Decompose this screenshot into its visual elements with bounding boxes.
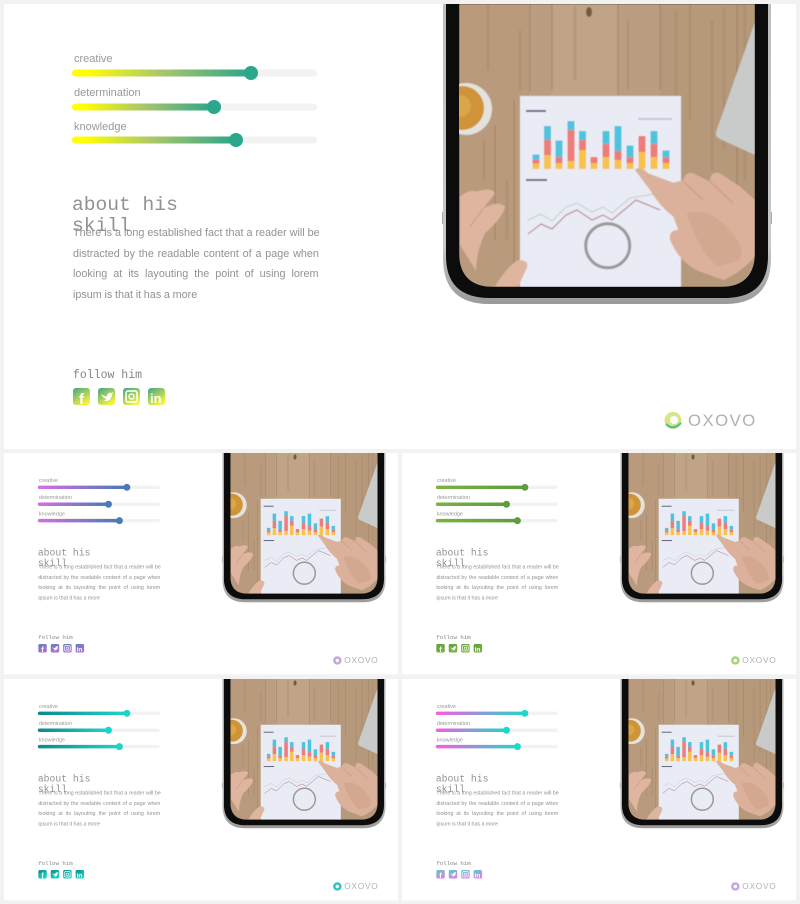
follow him label: follow him (436, 860, 471, 867)
social icons (38, 870, 84, 880)
body text (38, 564, 161, 601)
panel: small slide, teal theme (4, 679, 398, 900)
heading: about his (38, 773, 91, 784)
skill sliders: determination (437, 495, 470, 501)
skill sliders: creative (437, 478, 456, 484)
body text: There is a long established fact that a reader will be (436, 564, 559, 570)
social icons (436, 870, 482, 880)
body text: distracted by the readable content of a page when (436, 801, 558, 807)
heading (38, 547, 91, 569)
skill sliders: creative (74, 53, 113, 65)
skill sliders: knowledge (39, 738, 65, 744)
panel: main slide, yellow-green theme (4, 4, 796, 449)
heading: skill (436, 558, 465, 569)
body text: distracted by the readable content of a page when (73, 248, 319, 260)
skill sliders: knowledge (39, 512, 65, 518)
skill sliders: determination (437, 721, 470, 727)
body text: distracted by the readable content of a page when (38, 801, 160, 807)
heading: skill (38, 784, 67, 795)
follow him label: follow him (436, 634, 471, 641)
logo: OXOVO (742, 655, 776, 665)
heading (436, 773, 489, 795)
skill sliders (38, 704, 160, 750)
panel: small slide, purple theme (4, 453, 398, 674)
skill sliders: determination (39, 721, 72, 727)
logo: OXOVO (344, 655, 378, 665)
logo: OXOVO (344, 881, 378, 891)
social icons: f (439, 645, 442, 654)
phone mockup with desk photo (619, 679, 784, 828)
phone mockup with desk photo (221, 453, 386, 602)
body text: There is a long established fact that a reader will be (73, 227, 320, 239)
body text: There is a long established fact that a reader will be (436, 790, 559, 796)
social icons: in (475, 646, 480, 653)
panel: small slide, green theme (402, 453, 796, 674)
heading (72, 194, 178, 237)
skill sliders: knowledge (437, 738, 463, 744)
skill sliders: creative (437, 704, 456, 710)
logo: OXOVO (688, 411, 757, 430)
heading: skill (72, 215, 131, 237)
skill sliders (436, 704, 558, 750)
body text (73, 227, 320, 301)
social icons: f (79, 391, 85, 408)
panel: small slide, pink-cyan theme (402, 679, 796, 900)
follow him label: follow him (38, 634, 73, 641)
body text: There is a long established fact that a reader will be (38, 790, 161, 796)
social icons (436, 644, 482, 654)
body text: ipsum is that it has a more (436, 595, 498, 601)
body text: distracted by the readable content of a page when (38, 575, 160, 581)
body text: distracted by the readable content of a page when (436, 575, 558, 581)
logo: OXOVO (742, 881, 776, 891)
skill sliders: creative (39, 704, 58, 710)
phone mockup with desk photo (440, 4, 772, 304)
skill sliders (436, 478, 558, 524)
skill sliders: knowledge (437, 512, 463, 518)
body text: ipsum is that it has a more (38, 821, 100, 827)
heading (436, 547, 489, 569)
skill sliders (38, 478, 160, 524)
heading: skill (436, 784, 465, 795)
social icons: in (475, 872, 480, 879)
social icons: in (77, 646, 82, 653)
body text: ipsum is that it has a more (436, 821, 498, 827)
skill sliders: creative (39, 478, 58, 484)
follow him label: follow him (73, 369, 142, 382)
body text: looking at its layouting the point of using lorem (38, 585, 161, 591)
social icons: in (150, 391, 162, 406)
body text: looking at its layouting the point of using lorem (73, 268, 318, 280)
heading: about his (38, 547, 91, 558)
skill sliders: knowledge (74, 121, 127, 133)
body text: There is a long established fact that a reader will be (38, 564, 161, 570)
heading (38, 773, 91, 795)
body text (38, 790, 161, 827)
heading: about his (436, 547, 489, 558)
body text (436, 790, 559, 827)
heading: about his (72, 194, 178, 216)
social icons (38, 644, 84, 654)
phone mockup with desk photo (619, 453, 784, 602)
social icons: f (41, 871, 44, 880)
skill sliders (72, 53, 317, 147)
social icons: f (439, 871, 442, 880)
body text: looking at its layouting the point of using lorem (436, 585, 559, 591)
skill sliders: determination (39, 495, 72, 501)
body text: ipsum is that it has a more (38, 595, 100, 601)
body text (436, 564, 559, 601)
phone mockup with desk photo (221, 679, 386, 828)
social icons: in (77, 872, 82, 879)
heading: about his (436, 773, 489, 784)
social icons (73, 388, 165, 408)
social icons: f (41, 645, 44, 654)
skill sliders: determination (74, 87, 141, 99)
body text: looking at its layouting the point of using lorem (38, 811, 161, 817)
body text: looking at its layouting the point of using lorem (436, 811, 559, 817)
heading: skill (38, 558, 67, 569)
follow him label: follow him (38, 860, 73, 867)
body text: ipsum is that it has a more (73, 289, 197, 301)
